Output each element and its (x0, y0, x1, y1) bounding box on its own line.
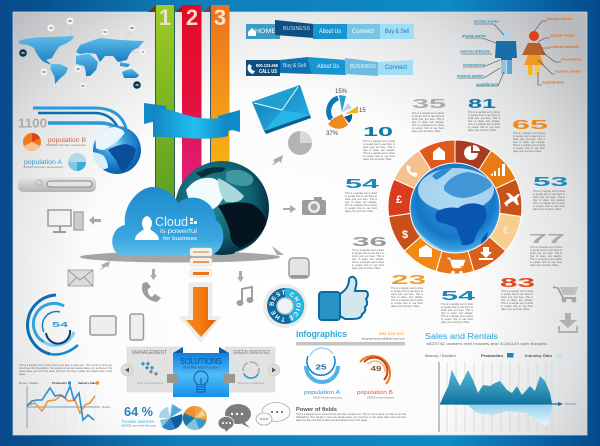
icon: envelope blue (252, 85, 311, 134)
navigation bar row 2 (246, 57, 413, 76)
number 83: 83 (500, 275, 535, 290)
cloud: for business (163, 236, 197, 242)
small tile mark (190, 218, 197, 224)
world map: 36 (68, 19, 72, 23)
small globe (92, 126, 141, 174)
circular chart 54 (28, 295, 78, 355)
navigation bar row 1: Buy & Sell (385, 29, 409, 35)
man figure (495, 31, 517, 74)
solutions right panel (225, 347, 280, 392)
blue wavy banner (144, 103, 240, 139)
cloud: Cloud (155, 214, 188, 229)
icon: device gray (289, 258, 309, 278)
text under 54 left: This is a sample text to show to people how to use them to show your text here. This is how to place text sample. This is a sample text to show to people how to use them place your text here. Place. (345, 192, 377, 213)
64 percent (121, 404, 156, 428)
text under 23: This is a sample text to show to people how to use them to show your text here. This is how to place text sample. This is a sample text to show to people how to use them place your text here. Place. (391, 287, 423, 308)
circle chart 25 population A: 42342 human resources (313, 396, 343, 400)
population B: 239362 human resources (46, 143, 87, 147)
right labels: muscle power (555, 68, 581, 74)
circle chart 25 population A: 25 (316, 364, 327, 372)
solutions centre panel: SOLUTIONS (180, 357, 222, 366)
64 percent: house owners (122, 419, 154, 424)
ribbon 3 orange: 3 (214, 5, 226, 30)
solutions right panel: Place your subtitle here (238, 382, 265, 385)
text under 81: This is a sample text to show to people how to use them to show your text here. This is how to place text sample. This is a sample text to show to people how to use them place your text here. Place. (468, 111, 500, 132)
population A: 42342 human resources (23, 165, 64, 169)
circle chart 25 population A (304, 348, 343, 400)
left labels: natural attitude (460, 48, 491, 54)
leader lines (457, 21, 561, 86)
number 35: 35 (412, 96, 446, 111)
icon: download gray (559, 313, 577, 332)
solutions centre panel (167, 347, 235, 397)
icon: tiles (141, 362, 158, 376)
badge: best choice (263, 284, 307, 328)
world map: 45 (76, 67, 80, 71)
ring chart (388, 140, 522, 274)
world map: 54 (103, 30, 107, 34)
text block left: This is a sample text to show how do you have to place text. This is a lot to show you how to use this infographics. Text sample is here text sample place your text here in this space place your text here place text here text how to place text sample here in this space. (19, 364, 112, 376)
infographics heading: infographics (296, 329, 347, 339)
text under 10: This is a sample text to show to people how to use them to show your text here. This is how to place text sample. This is a sample text to show to people how to use them place your text here. Place. (363, 140, 395, 161)
big orange arrow (180, 283, 221, 342)
navigation bar row 2: About Us (317, 64, 339, 70)
infographics heading (296, 329, 406, 346)
gray arrows and icons (68, 246, 309, 340)
circle chart 25 population A: population A (304, 390, 340, 396)
small orange bars (190, 248, 212, 277)
circle chart 49 population B (357, 356, 394, 400)
sales and rentals heading: 4623742 owners rent houses and 4134124 own housed. (426, 341, 548, 346)
world map: 82 (130, 26, 134, 30)
ring icons: $ (402, 229, 408, 241)
population B (23, 133, 87, 151)
line chart: Production (52, 381, 67, 385)
arrows around big globe (272, 155, 296, 213)
badge: best choice: THE BEST CHOICE (269, 290, 301, 322)
number 65: 65 (512, 117, 548, 132)
icon: mail gray (68, 270, 93, 286)
icon: camera (302, 197, 326, 215)
icon: shopping cart gray (553, 287, 578, 302)
shadow beneath cloud (80, 252, 280, 262)
64 percent: 292902 own their flat year (121, 424, 156, 428)
navigation bar row 2: Connect (385, 65, 407, 71)
line chart: Industry Gain (78, 381, 96, 385)
64 percent: 64 % (124, 404, 153, 419)
number 53: 53 (533, 174, 568, 189)
small blue tracks and 1100: 1100 (18, 116, 47, 130)
text under 65: This is a sample text to show to people how to use them to show your text here. This is how to place text sample. This is a sample text to show to people how to use them place your text here. Place. (513, 132, 545, 153)
navigation bar row 1: About Us (319, 29, 341, 35)
right nav button (268, 364, 280, 376)
sales area chart: Months (565, 402, 577, 406)
icon: thumbs up (319, 277, 368, 320)
man and woman diagram (457, 16, 583, 86)
population A (23, 153, 86, 171)
donut pie with percentages: 15 (359, 108, 366, 114)
number 23: 23 (391, 272, 426, 287)
power of fields: Power of fields (296, 407, 337, 413)
icon: phone gray (142, 282, 161, 302)
text under 35: This is a sample text to show to people how to use them to show your text here. This is how to place text sample. This is a sample text to show to people how to use them place your text here. Place. (412, 112, 444, 133)
sales area chart: Production (481, 353, 504, 358)
number 54 centre: 54 (441, 288, 477, 303)
line chart: Money / Dollars (19, 381, 39, 385)
text under 53: This is a sample text to show to people how to use them to show your text here. This is how to place text sample. This is a sample text to show to people how to use them place your text here. Place. (533, 190, 565, 211)
left labels: muscle power (457, 73, 484, 78)
icon: music note (238, 287, 252, 305)
donut pie with percentages: 37% (326, 131, 339, 137)
right labels: inconsuries (561, 56, 583, 62)
world map (18, 17, 147, 90)
right labels (542, 16, 583, 84)
text under 83: This is a sample text to show to people how to use them to show your text here. This is how to place text sample. This is a sample text to show to people how to use them place your text here. Place. (501, 290, 533, 311)
icon: computer (48, 210, 83, 232)
right labels: physic works (551, 32, 576, 38)
world map: 73 (49, 26, 53, 30)
icon: smartphone (130, 314, 144, 340)
world map: 2 (142, 50, 144, 54)
icon: tablet (90, 316, 116, 335)
number 54 left: 54 (345, 176, 381, 191)
solutions left panel: MANAGEMENT (132, 350, 168, 356)
icon: light bulb (194, 371, 208, 392)
ribbon 2 red (175, 5, 202, 185)
cloud: is powerful (160, 228, 198, 235)
circle chart 49 population B: 239362 human resources (367, 396, 394, 400)
solutions left panel (121, 347, 182, 392)
line chart: Months (102, 406, 111, 409)
left labels: inconsuries (463, 62, 486, 67)
map bubbles (40, 17, 147, 90)
circle chart 49 population B: population B (357, 390, 393, 396)
world map: 28 (135, 83, 139, 87)
sales area chart: Money / Dollars (425, 353, 457, 358)
icon: person (135, 216, 159, 240)
ring icons (396, 145, 520, 274)
icon: recycling arrows (243, 362, 259, 378)
donut pie with percentages (326, 89, 366, 137)
arrow near computer (89, 216, 101, 225)
navigation bar row 1: BUSINESS (283, 26, 310, 32)
solutions centre panel: find the best for you (183, 364, 219, 370)
ribbon 3 orange (203, 5, 230, 170)
line chart (19, 381, 111, 428)
right labels: natural attitude (550, 44, 580, 49)
ring icons: € (503, 225, 509, 237)
cloud (112, 187, 223, 256)
solutions right panel: GREEN ORIENTED (233, 350, 270, 356)
ribbon 1 green: 1 (159, 5, 171, 30)
text under 54 centre: This is a sample text to show to people how to use them to show your text here. This is how to place text sample. This is a sample text to show to people how to use them place your text here. Place. (441, 303, 473, 324)
pie: multicolour (183, 406, 207, 430)
navigation bar row 2: BUSINESS (350, 64, 376, 70)
donut pie with percentages: 15% (335, 89, 348, 95)
woman figure (522, 31, 546, 75)
population A: population A (24, 159, 63, 166)
infographics heading: 993 323 021 (379, 331, 405, 336)
number 77: 77 (529, 231, 565, 246)
small blue tracks and 1100 (18, 108, 126, 130)
left nav button (121, 364, 133, 376)
pie: blue rays (159, 404, 183, 430)
solutions left panel: Place your subtitle here (137, 382, 164, 385)
power of fields: This is a sample text to show how do you have to place text. This is a lot to show you how to use this infographics. Text sample is here text sample place your text here in this space place your text here place text here text how to place text and sample here in this space. (296, 413, 406, 422)
globe in ring (410, 164, 500, 254)
circular chart 54: 54 (52, 322, 68, 329)
sales and rentals heading (425, 332, 548, 346)
number 36: 36 (352, 234, 387, 249)
text under 36: This is a sample text to show to people how to use them to show your text here. This is how to place text sample. This is a sample text to show to people how to use them place your text here. Place. (352, 249, 384, 270)
navigation bar row 2: Buy & Sell (283, 63, 306, 69)
ring icons: £ (396, 194, 402, 206)
world map: 88 (21, 51, 25, 55)
infographics heading: infographicsemail@service.com (361, 336, 406, 340)
big dark globe (176, 161, 269, 255)
sales area chart: Industry Gain (525, 353, 553, 358)
chat bubbles gray (218, 404, 251, 432)
navigation bar row 1: Connect (352, 29, 374, 35)
right labels: equilibrium (542, 80, 564, 84)
sales area chart (425, 353, 577, 432)
power of fields (296, 407, 406, 426)
right labels: mental works (547, 16, 573, 21)
number 81: 81 (468, 96, 496, 111)
bright sheen over land (186, 178, 224, 212)
search box (18, 177, 96, 192)
world map: 54 (42, 70, 46, 74)
chat bubbles outline (256, 402, 290, 425)
navigation bar row 2: CALL US (259, 69, 278, 75)
navigation bar row 1 (246, 20, 414, 39)
ribbon 2 red: 2 (186, 5, 198, 30)
number 10: 10 (363, 124, 393, 139)
world map: 27 (81, 84, 85, 88)
text under 77: This is a sample text to show to people how to use them to show your text here. This is how to place text sample. This is a sample text to show to people how to use them place your text here. Place. (530, 246, 562, 267)
left labels: equilibrium (476, 82, 498, 86)
left labels (457, 18, 500, 86)
navigation bar row 1: HOME (255, 28, 277, 35)
navigation bar row 2: 800.123.456 (256, 63, 278, 68)
circle chart 49 population B: 49 (370, 366, 382, 373)
left labels: physic works (462, 33, 487, 38)
ribbon 1 green (148, 5, 175, 200)
population B: population B (48, 137, 86, 144)
sales and rentals heading: Sales and Rentals (425, 332, 498, 341)
left labels: mental works (474, 18, 500, 24)
gray pie (288, 131, 312, 155)
